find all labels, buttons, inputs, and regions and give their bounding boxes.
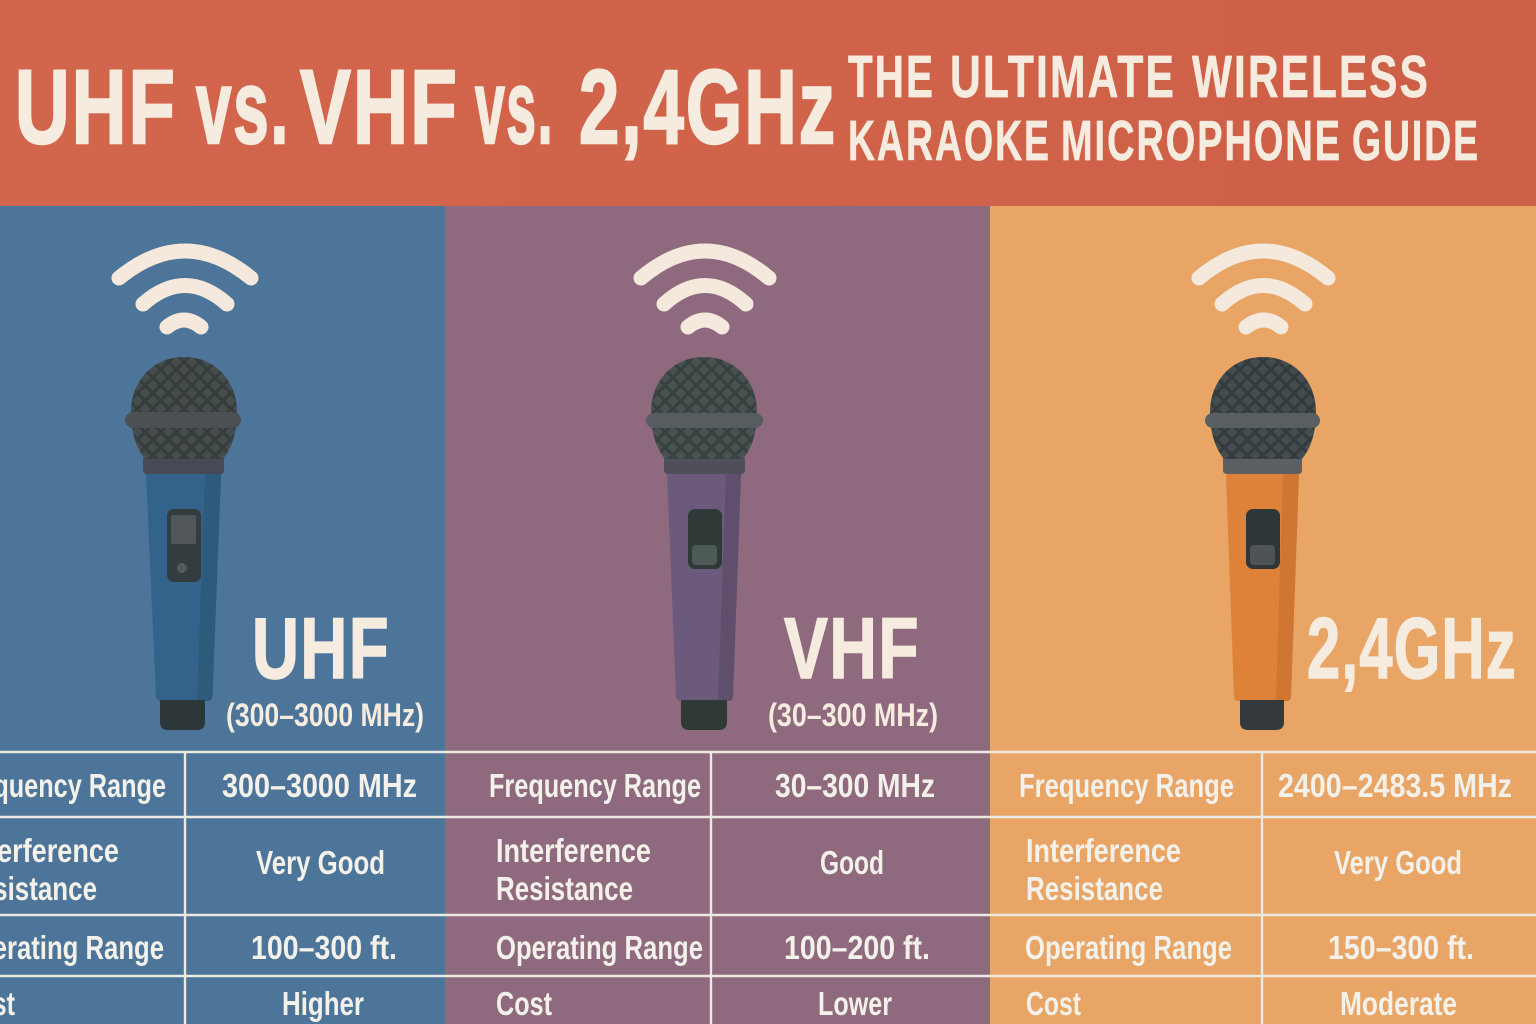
table: VHF specs: Frequency Range	[489, 767, 701, 804]
table: VHF specs: Good	[820, 844, 884, 881]
table: UHF specs: Higher	[282, 985, 364, 1022]
subtitle: WIRELESS	[1192, 44, 1430, 110]
label: UHF: UHF	[252, 601, 390, 697]
main title: vs.	[196, 49, 290, 166]
icon: 2,4GHz microphone	[1205, 357, 1320, 730]
main title	[15, 49, 837, 166]
table: UHF specs: 100–300 ft.	[251, 929, 397, 966]
subtitle: ULTIMATE	[950, 44, 1176, 110]
table: UHF specs	[0, 767, 417, 1022]
table: 2,4GHz specs: Cost	[1026, 985, 1081, 1022]
subtitle: MICROPHONE	[1061, 109, 1342, 173]
table grid lines	[0, 752, 1536, 1024]
table: UHF specs: 300–3000 MHz	[222, 767, 417, 804]
main title: 2,4GHz	[579, 49, 837, 166]
subtitle	[848, 44, 1480, 173]
header banner	[0, 0, 1536, 206]
label: UHF	[226, 601, 424, 733]
main title: UHF	[15, 49, 177, 166]
icon: UHF wifi signal	[119, 251, 251, 327]
main title: vs.	[475, 49, 554, 166]
table: 2,4GHz specs	[1019, 767, 1512, 1022]
table: UHF specs: Very Good	[256, 844, 385, 881]
subtitle: KARAOKE	[848, 109, 1051, 173]
label: VHF: (30–300 MHz)	[768, 697, 938, 733]
table: VHF specs: Resistance	[496, 870, 633, 907]
icon: VHF wifi signal	[641, 251, 769, 327]
panel: VHF background	[445, 206, 990, 1024]
table: 2,4GHz specs: Operating Range	[1025, 929, 1232, 966]
main title: VHF	[300, 49, 459, 166]
table: VHF specs: Lower	[818, 985, 892, 1022]
table: VHF specs: Interference	[496, 832, 651, 869]
table: VHF specs	[489, 767, 935, 1022]
icon: VHF microphone	[646, 357, 763, 730]
panel: UHF background	[0, 206, 445, 1024]
table: VHF specs: 100–200 ft.	[784, 929, 930, 966]
table: 2,4GHz specs: Very Good	[1334, 844, 1462, 881]
table: 2,4GHz specs: Interference	[1026, 832, 1181, 869]
table: 2,4GHz specs: Moderate	[1340, 985, 1457, 1022]
icon: 2,4GHz wifi signal	[1199, 251, 1328, 327]
icon: UHF microphone	[125, 357, 241, 730]
label: VHF: VHF	[784, 601, 920, 697]
label: VHF	[768, 601, 938, 733]
table: VHF specs: Cost	[496, 985, 552, 1022]
table: 2,4GHz specs: Frequency Range	[1019, 767, 1234, 804]
label: UHF: (300–3000 MHz)	[226, 697, 424, 733]
subtitle: THE	[848, 44, 935, 110]
table: 2,4GHz specs: Resistance	[1026, 870, 1163, 907]
table: 2,4GHz specs: 150–300 ft.	[1328, 929, 1474, 966]
panel: 2,4GHz background	[990, 206, 1536, 1024]
table: VHF specs: 30–300 MHz	[775, 767, 935, 804]
table: VHF specs: Operating Range	[496, 929, 703, 966]
